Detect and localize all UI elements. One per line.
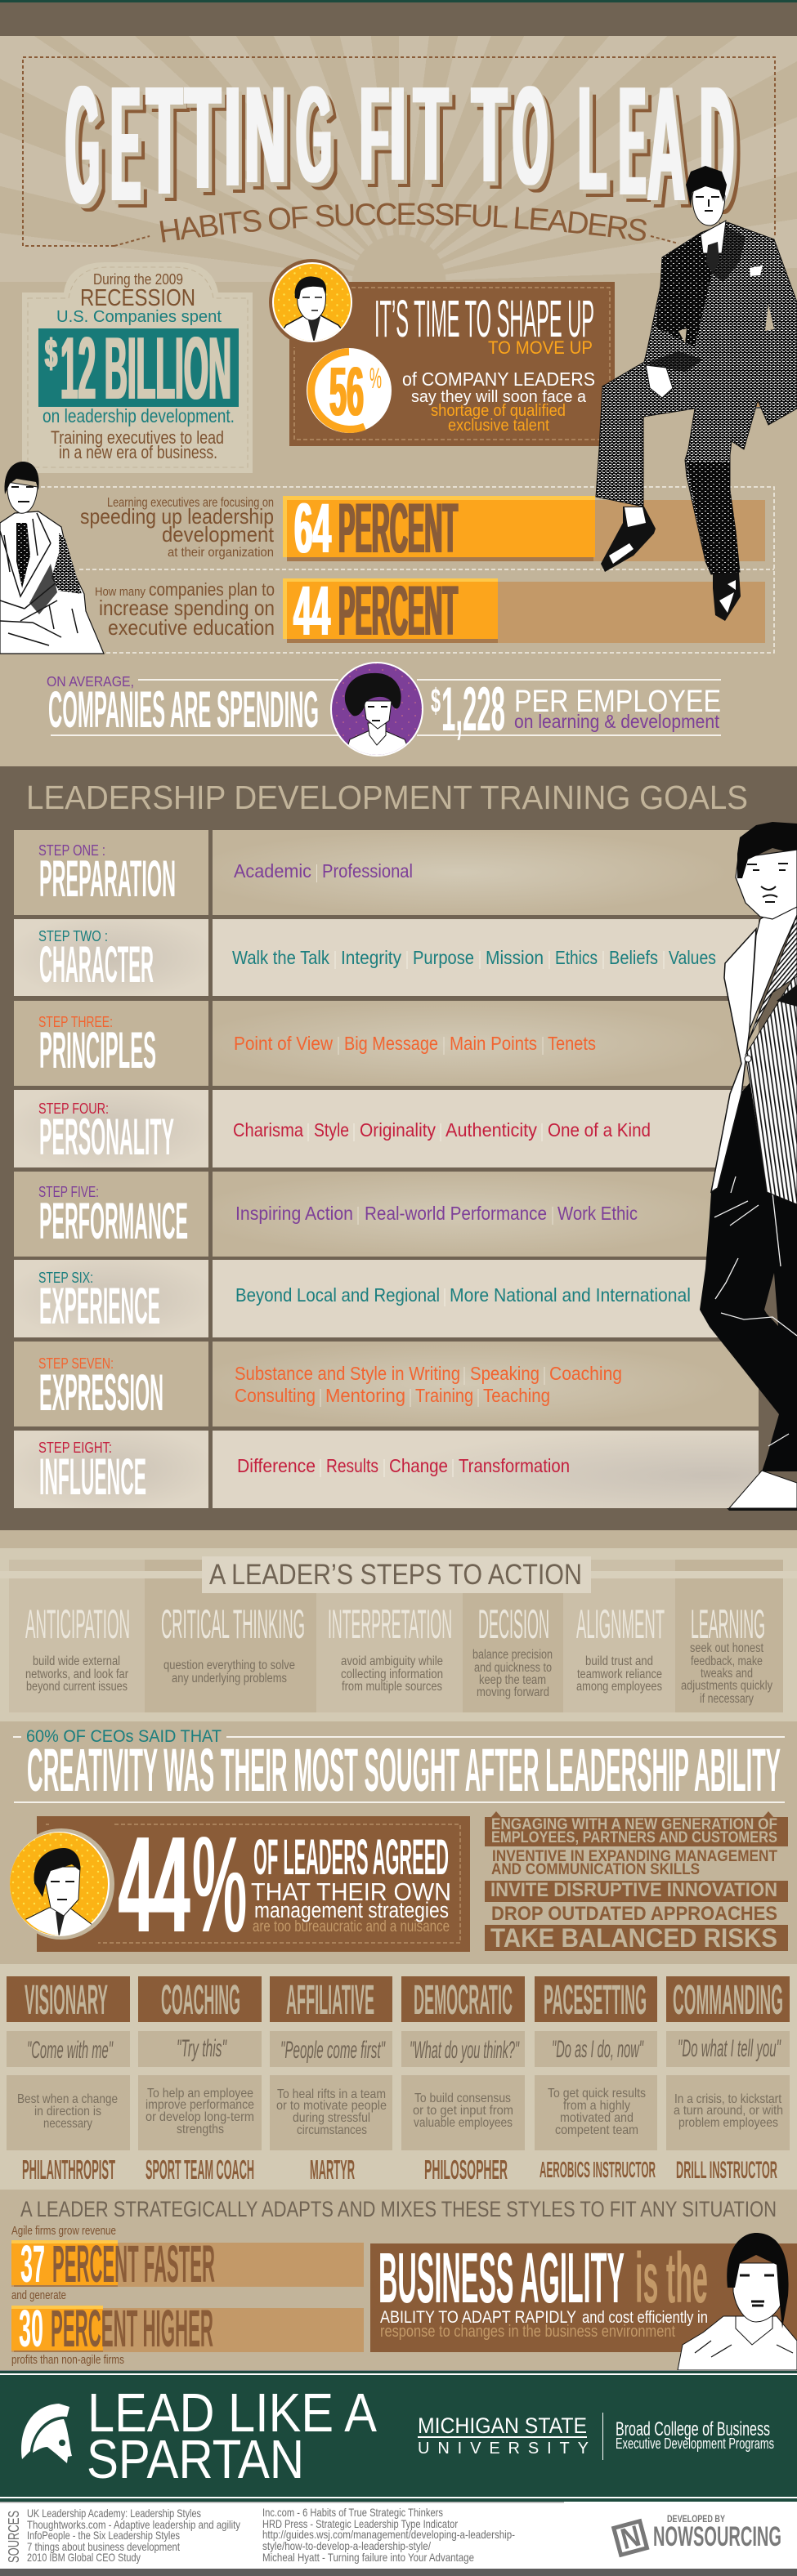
row: step five performance: Inspiring Action — [235, 1203, 353, 1224]
row: step four personality: PERSONALITY — [39, 1109, 174, 1166]
row: step five performance: Real-world Performance — [365, 1203, 547, 1224]
title: getting fit to lead: E — [110, 52, 141, 235]
sources column 2: http://guides.wsj.com/management/developing-a-leadership- — [262, 2528, 515, 2541]
bar chart: 64 percent — [283, 489, 765, 568]
bottom band — [0, 2569, 797, 2576]
title: getting fit to lead: T — [146, 55, 182, 227]
sources column 1: Thoughtworks.com - Adaptive leadership and agility — [27, 2518, 240, 2531]
row: step three principles — [14, 1001, 759, 1086]
chart: 56 percent donut — [307, 348, 392, 433]
style descriptions: To get quick results — [548, 2087, 646, 2101]
row: step four personality: One of a Kind — [548, 1119, 651, 1141]
heading: LEADERSHIP DEVELOPMENT TRAINING GOALS — [26, 779, 748, 816]
row: step six experience: STEP SIX: — [38, 1270, 93, 1286]
row: step eight influence: Difference — [237, 1455, 316, 1476]
text: of company leaders: of COMPANY LEADERS — [402, 368, 595, 390]
top band — [0, 0, 797, 36]
text: ability to adapt: ABILITY TO ADAPT RAPIDLY — [380, 2308, 576, 2327]
row: step seven expression: STEP SEVEN: — [38, 1355, 114, 1372]
step descriptions: tweaks and — [701, 1667, 753, 1681]
row: step one preparation: STEP ONE : — [38, 842, 105, 859]
chart: 56 percent donut: % — [369, 363, 382, 395]
text: say they will soon: say they will soon face a — [411, 388, 587, 406]
text: spartan: SPARTAN — [87, 2429, 304, 2490]
row: step eight influence: INFLUENCE — [39, 1449, 146, 1506]
text: how many companies: companies plan to — [149, 579, 275, 600]
title: getting fit to lead: T — [185, 56, 221, 219]
sources column 2: Micheal Hyatt - Turning failure into Your Advantage — [262, 2551, 474, 2564]
text: how many companies: increase spending on — [99, 596, 275, 620]
title: getting fit to lead — [65, 51, 734, 244]
step descriptions: adjustments quickly — [681, 1679, 772, 1693]
row: step two character: Purpose — [413, 947, 474, 968]
style quotes: "What do you think?" — [410, 2037, 520, 2064]
bar chart: 44 percent: 44 — [293, 572, 330, 650]
row: step four personality: Charisma — [233, 1119, 303, 1141]
figure: seated man in tweed suit — [596, 166, 797, 621]
bar: 37 percent faster: PERCENT FASTER — [52, 2234, 215, 2293]
text: profits than non-agile: profits than non-agile firms — [11, 2353, 124, 2367]
style role labels: MARTYR — [310, 2154, 355, 2185]
bar: 37 percent faster — [11, 2234, 364, 2293]
text: 60 percent of ceos: 60% OF CEOs SAID THAT — [26, 1727, 222, 1746]
row: step eight influence: Change — [389, 1455, 448, 1476]
style descriptions: or to motivate people — [276, 2099, 387, 2113]
row: step eight influence: Results — [326, 1455, 378, 1476]
text: lead like a: LEAD LIKE A — [87, 2382, 377, 2444]
style role labels — [22, 2154, 777, 2185]
figure: man in striped jacket — [700, 822, 797, 1511]
callout: companies are spending: COMPANIES ARE SPENDING — [48, 681, 319, 739]
step headings: DECISION — [478, 1601, 549, 1647]
title: getting fit to lead: I — [224, 57, 241, 217]
text: and generate: and generate — [11, 2288, 66, 2302]
callout: companies are spending — [47, 662, 721, 760]
title: getting fit to lead: E — [619, 56, 646, 228]
text: per employee: PER EMPLOYEE — [514, 685, 721, 719]
sources column 1: 2010 IBM Global CEO Study — [27, 2551, 141, 2564]
title: getting fit to lead: F — [360, 58, 389, 208]
style descriptions: Best when a change — [17, 2092, 118, 2106]
text: management strategies: management strategies — [254, 1898, 449, 1922]
text: training executives: Training executives to lead — [51, 427, 224, 448]
step descriptions: build wide external — [33, 1654, 120, 1668]
row: step four personality — [14, 1090, 759, 1167]
step descriptions: moving forward — [477, 1685, 549, 1699]
text: sources label: SOURCES — [6, 2511, 22, 2563]
row: step six experience: More National and International — [450, 1284, 691, 1306]
sources column 1: InfoPeople - the Six Leadership Styles — [27, 2529, 180, 2542]
sources column 1: 7 things about business development — [27, 2540, 180, 2553]
heading box: A LEADER’S STEPS TO ACTION — [209, 1559, 582, 1591]
text: how many companies — [95, 579, 275, 640]
text: new era of business: in a new era of business. — [59, 442, 217, 462]
style descriptions: valuable employees — [414, 2116, 513, 2130]
text: agile firms grow revenue: Agile firms grow revenue — [11, 2224, 116, 2238]
panel: 44 percent of leaders — [10, 1816, 470, 1952]
bar chart: 64 percent: 64 — [294, 489, 331, 568]
sources column 2: HRD Press - Strategic Leadership Type Indicator — [262, 2517, 458, 2530]
logo: michigan state university — [418, 2413, 589, 2458]
row: step two character — [14, 919, 759, 996]
row: step three principles: Big Message — [344, 1033, 438, 1054]
bar: 30 percent higher — [11, 2299, 364, 2358]
text: learning executives: speeding up leadership — [80, 504, 274, 529]
step descriptions: keep the team — [479, 1673, 546, 1687]
style quotes: "Do as I do, now" — [552, 2036, 644, 2063]
bar: 30 percent higher: 30 — [19, 2299, 43, 2358]
row: step four personality: Authenticity — [446, 1119, 537, 1141]
list: leadership actions: AND COMMUNICATION SKILLS — [491, 1861, 700, 1878]
style headers: COACHING — [161, 1976, 240, 2023]
style quotes: "Try this" — [177, 2035, 227, 2062]
stats dashed frame — [41, 487, 774, 653]
figure: man in white suit — [0, 462, 104, 654]
bar chart: 64 percent: PERCENT — [338, 489, 458, 568]
row: step three principles: Main Points — [450, 1033, 537, 1054]
icon: woman portrait in purple circle — [330, 662, 423, 760]
style descriptions: motivated and — [560, 2111, 634, 2125]
style descriptions — [7, 2075, 790, 2150]
callout: companies are spending: 1,228 — [441, 675, 505, 744]
style descriptions: or to get input from — [413, 2104, 513, 2118]
step descriptions: from multiple sources — [342, 1680, 442, 1694]
title: getting fit to lead: N — [244, 58, 286, 212]
infographic artwork: OF LEADERS AGREED — [253, 1829, 449, 1885]
step headings: CRITICAL THINKING — [161, 1601, 305, 1647]
step descriptions: build trust and — [585, 1654, 653, 1668]
panel: sources — [0, 2502, 797, 2569]
style descriptions: To build consensus — [414, 2092, 511, 2105]
row: step two character: STEP TWO : — [38, 928, 108, 944]
style descriptions: In a crisis, to kickstart — [674, 2092, 781, 2106]
sources column 1 — [27, 2507, 240, 2564]
row: step five performance — [14, 1172, 759, 1257]
text: how many companies: executive education — [108, 615, 275, 640]
title: getting fit to lead: T — [414, 58, 448, 208]
row: step eight influence: Transformation — [459, 1455, 570, 1476]
sources column 1: UK Leadership Academy: Leadership Styles — [27, 2507, 201, 2520]
row: step eight influence: STEP EIGHT: — [38, 1440, 112, 1456]
row: step three principles: STEP THREE: — [38, 1014, 113, 1030]
row: step two character: Integrity — [341, 947, 401, 968]
style headers: AFFILIATIVE — [286, 1976, 374, 2023]
box: 12 billion: $ — [45, 331, 57, 377]
style quotes: "People come first" — [280, 2037, 386, 2064]
chart: 56 percent donut: 56 — [329, 353, 364, 430]
text: learning executives — [80, 496, 275, 560]
row: step seven expression: Speaking — [470, 1363, 540, 1384]
bar chart: 44 percent — [283, 572, 765, 650]
text: too bureaucratic: are too bureaucratic and a nuisance — [253, 1918, 450, 1935]
row: step three principles: Point of View — [234, 1033, 333, 1054]
style quotes: "Come with me" — [27, 2037, 114, 2064]
row: step one preparation — [14, 830, 759, 915]
row: step four personality: Style — [314, 1119, 349, 1141]
bar chart: agile growth — [11, 2224, 364, 2367]
step descriptions: feedback, make — [691, 1654, 763, 1668]
step headings — [25, 1601, 765, 1647]
step descriptions: networks, and look far — [25, 1667, 128, 1681]
row: step six experience: EXPERIENCE — [39, 1278, 160, 1335]
logo: michigan state university: UNIVERSITY — [418, 2440, 589, 2458]
panel: shape up — [269, 259, 615, 446]
title: getting fit to lead: T — [472, 59, 507, 211]
text: on learning and development: on learning & development — [514, 711, 720, 732]
title: getting fit to lead: G — [296, 59, 332, 211]
infographic artwork: 12 BILLION — [60, 319, 231, 418]
text: to move up: TO MOVE UP — [488, 337, 593, 358]
bar chart: 44 percent: PERCENT — [338, 572, 458, 650]
title: getting fit to lead: O — [513, 57, 548, 214]
style descriptions: or develop long-term — [146, 2110, 254, 2124]
row: step four personality: Originality — [360, 1119, 436, 1141]
style quotes — [7, 2031, 790, 2067]
footer band: lead like a spartan — [0, 2370, 797, 2502]
text: that their own: THAT THEIR OWN — [251, 1877, 451, 1906]
step descriptions: and quickness to — [474, 1661, 552, 1675]
row: step five performance: PERFORMANCE — [39, 1193, 188, 1250]
row: step two character: Beliefs — [609, 947, 658, 968]
subtitle: HABITS OF SUCCESSFUL LEADERS — [160, 203, 647, 243]
text: exclusive talent: exclusive talent — [448, 417, 549, 435]
list: leadership actions: DROP OUTDATED APPROACHES — [491, 1903, 777, 1925]
panel: recession spending — [22, 262, 253, 473]
row: step seven expression: Teaching — [483, 1385, 550, 1406]
row: step seven expression: EXPRESSION — [39, 1364, 163, 1422]
sources column 2: Inc.com - 6 Habits of True Strategic Thinkers — [262, 2506, 443, 2519]
row: step one preparation: Academic — [234, 860, 311, 882]
sources column 2: style/how-to-develop-a-leadership-style/ — [262, 2539, 431, 2552]
list: leadership actions: INVITE DISRUPTIVE INNOVATION — [490, 1879, 777, 1901]
step descriptions: question everything to solve — [163, 1659, 295, 1672]
bar: 37 percent faster: 37 — [20, 2234, 45, 2293]
row: step one preparation: PREPARATION — [39, 850, 176, 908]
row: step two character: Ethics — [555, 947, 598, 968]
list: leadership actions: TAKE BALANCED RISKS — [490, 1923, 777, 1953]
row: step two character: Mission — [486, 947, 544, 968]
icon: spartan helmet — [21, 2404, 72, 2463]
title: getting fit to lead: D — [700, 51, 734, 244]
style role labels: PHILOSOPHER — [424, 2154, 508, 2185]
row: step three principles: Tenets — [548, 1033, 596, 1054]
logo: michigan state university: MICHIGAN STATE — [418, 2413, 587, 2438]
panel: 44 percent of leaders: % — [192, 1809, 247, 1961]
style descriptions: To heal rifts in a team — [277, 2087, 386, 2101]
style role labels: SPORT TEAM COACH — [146, 2154, 254, 2185]
step descriptions: avoid ambiguity while — [341, 1654, 443, 1668]
title: getting fit to lead: A — [647, 52, 685, 235]
step headings: ANTICIPATION — [25, 1601, 130, 1647]
panel: leadership styles — [0, 1964, 797, 2190]
text: learning executives: development — [162, 522, 275, 547]
dashed title frame — [23, 57, 775, 246]
style descriptions: in direction is — [34, 2105, 101, 2118]
step descriptions: teamwork reliance — [577, 1667, 662, 1681]
row: step two character: Walk the Talk — [232, 947, 329, 968]
text: on leadership development: on leadership development. — [43, 405, 235, 426]
row: step six experience: Beyond Local and Regional — [235, 1284, 440, 1306]
title: getting fit to lead: I — [389, 58, 406, 208]
bar: 30 percent higher: PERCENT HIGHER — [51, 2299, 213, 2358]
logo: nowsourcing — [611, 2513, 781, 2557]
icon: man portrait in yellow circle — [8, 1828, 114, 1940]
text: on average: ON AVERAGE, — [47, 673, 134, 690]
style descriptions: circumstances — [297, 2123, 367, 2137]
text: during the 2009: During the 2009 — [93, 271, 183, 288]
title: getting fit to lead: L — [578, 56, 607, 222]
style descriptions: a turn around, or with — [674, 2104, 783, 2118]
text: us companies spent: U.S. Companies spent — [56, 307, 222, 326]
row: step seven expression — [14, 1342, 759, 1426]
step descriptions: seek out honest — [690, 1641, 764, 1655]
step headings: INTERPRETATION — [328, 1601, 452, 1647]
row: step seven expression: Substance and Style in Writing — [235, 1363, 460, 1384]
style descriptions: strengths — [177, 2123, 224, 2136]
stat: 1,228 dollars: $ — [431, 681, 441, 720]
row: step seven expression: Training — [415, 1385, 473, 1406]
figure: woman portrait — [678, 2233, 797, 2370]
style descriptions: To help an employee — [147, 2087, 253, 2101]
style descriptions: competent team — [555, 2123, 638, 2137]
list: leadership actions — [485, 1811, 788, 1953]
panel: a leaders steps to action — [0, 1548, 797, 1721]
text: learning executives: Learning executives are focusing on — [107, 496, 274, 510]
style descriptions: during stressful — [293, 2111, 370, 2125]
row: step seven expression: Consulting — [235, 1385, 316, 1406]
text: how many companies: How many — [95, 585, 146, 599]
row: step five performance: Work Ethic — [557, 1203, 638, 1224]
style headers — [7, 1976, 790, 2023]
stat: 44 percent: 44 — [119, 1809, 190, 1961]
style headers: DEMOCRATIC — [414, 1976, 513, 2023]
row: step five performance: STEP FIVE: — [38, 1184, 99, 1200]
step descriptions: balance precision — [472, 1648, 553, 1662]
row: step one preparation: Professional — [322, 860, 413, 882]
style headers: VISIONARY — [25, 1976, 108, 2023]
text: learning executives: at their organization — [168, 546, 274, 560]
panel: business agility — [370, 2233, 797, 2370]
sources column 2 — [262, 2506, 515, 2564]
row: step four personality: STEP FOUR: — [38, 1100, 109, 1117]
style descriptions: from a highly — [563, 2099, 630, 2113]
style descriptions: necessary — [43, 2117, 92, 2131]
icon: man portrait in yellow circle — [269, 259, 354, 346]
text: response to changes: response to changes in the business environment — [380, 2323, 675, 2341]
step descriptions: among employees — [576, 1680, 662, 1694]
row: step seven expression: Coaching — [549, 1363, 622, 1384]
row: step two character: Values — [669, 947, 716, 968]
row: step two character: CHARACTER — [39, 936, 154, 993]
style role labels: PHILANTHROPIST — [22, 2154, 115, 2185]
step descriptions: any underlying problems — [172, 1672, 287, 1685]
box: 12 billion — [38, 319, 239, 418]
text: recession: RECESSION — [80, 285, 195, 311]
logo: nowsourcing: DEVELOPED BY — [667, 2513, 725, 2525]
row: step six experience — [14, 1260, 759, 1337]
row: step eight influence — [14, 1431, 759, 1508]
row: step three principles: PRINCIPLES — [39, 1022, 156, 1079]
text: shortage: shortage of qualified — [431, 402, 566, 420]
text: cost efficiently: and cost efficiently in — [582, 2309, 708, 2327]
panel: leadership development training goals — [0, 766, 797, 1530]
step descriptions — [25, 1641, 772, 1706]
step descriptions: if necessary — [700, 1692, 754, 1706]
step descriptions: beyond current issues — [26, 1680, 128, 1694]
stat: 1,228 dollars — [431, 675, 505, 744]
style descriptions: problem employees — [678, 2116, 778, 2130]
title: getting fit to lead: G — [65, 52, 100, 239]
style descriptions: improve performance — [146, 2098, 254, 2112]
callout: creativity — [13, 1727, 785, 1804]
background: sunburst rays — [0, 36, 797, 282]
logo: nowsourcing: N — [617, 2519, 644, 2556]
row: step seven expression: Mentoring — [325, 1385, 405, 1406]
step descriptions: collecting information — [341, 1667, 443, 1681]
